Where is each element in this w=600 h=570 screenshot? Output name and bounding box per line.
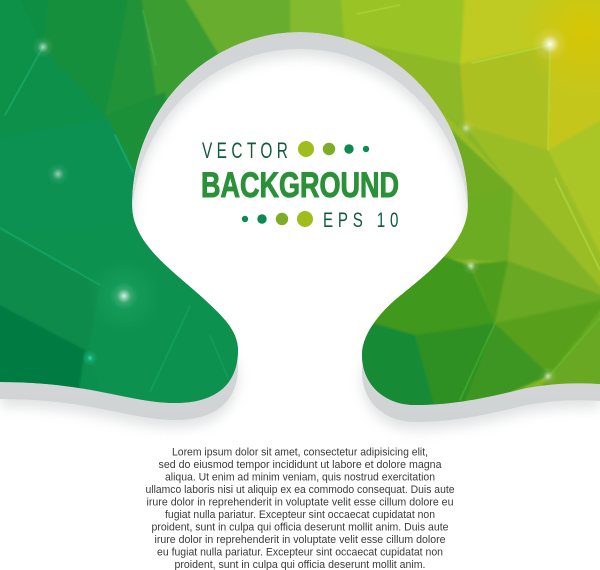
title: BACKGROUND: BACKGROUND bbox=[201, 166, 399, 205]
label: VECTOR: VECTOR bbox=[202, 139, 292, 164]
body paragraph: irure dolor in reprehenderit in voluptate velit esse cillum dolore eu bbox=[146, 496, 454, 508]
body paragraph: Lorem ipsum dolor sit amet, consectetur adipisicing elit, bbox=[172, 447, 428, 459]
soft teal highlight bbox=[108, 280, 141, 312]
body paragraph: sed do eiusmod tempor incididunt ut labore et dolore magna bbox=[158, 459, 442, 471]
light streaks bbox=[0, 5, 600, 400]
body paragraph: aliqua. Ut enim ad minim veniam, quis nostrud exercitation bbox=[165, 472, 435, 484]
body paragraph: irure dolor in reprehenderit in voluptate velit esse cillum dolore bbox=[154, 534, 446, 546]
bottom dot row bbox=[242, 211, 313, 227]
yellow hot spot bbox=[538, 0, 600, 73]
heading: vector background eps 10 bbox=[201, 139, 403, 232]
body paragraph: ullamco laboris nisi ut aliquip ex ea commodo consequat. Duis aute bbox=[146, 484, 455, 496]
body paragraph: proident, sunt in culpa qui officia deserunt mollit anim. Duis aute bbox=[152, 521, 449, 533]
polygon background panel bbox=[0, 0, 600, 420]
label: EPS 10: EPS 10 bbox=[323, 207, 403, 232]
grey paper edge bbox=[0, 17, 600, 422]
body paragraph: fugiat nulla pariatur. Excepteur sint occaecat cupidatat non bbox=[165, 509, 435, 521]
body paragraph: eu fugiat nulla pariatur. Excepteur sint occaecat cupidatat non bbox=[157, 546, 443, 558]
body paragraph bbox=[146, 447, 455, 570]
sparkle lights bbox=[34, 38, 52, 56]
paper cut-out shadow bbox=[0, 25, 600, 430]
top dot row bbox=[298, 141, 369, 157]
